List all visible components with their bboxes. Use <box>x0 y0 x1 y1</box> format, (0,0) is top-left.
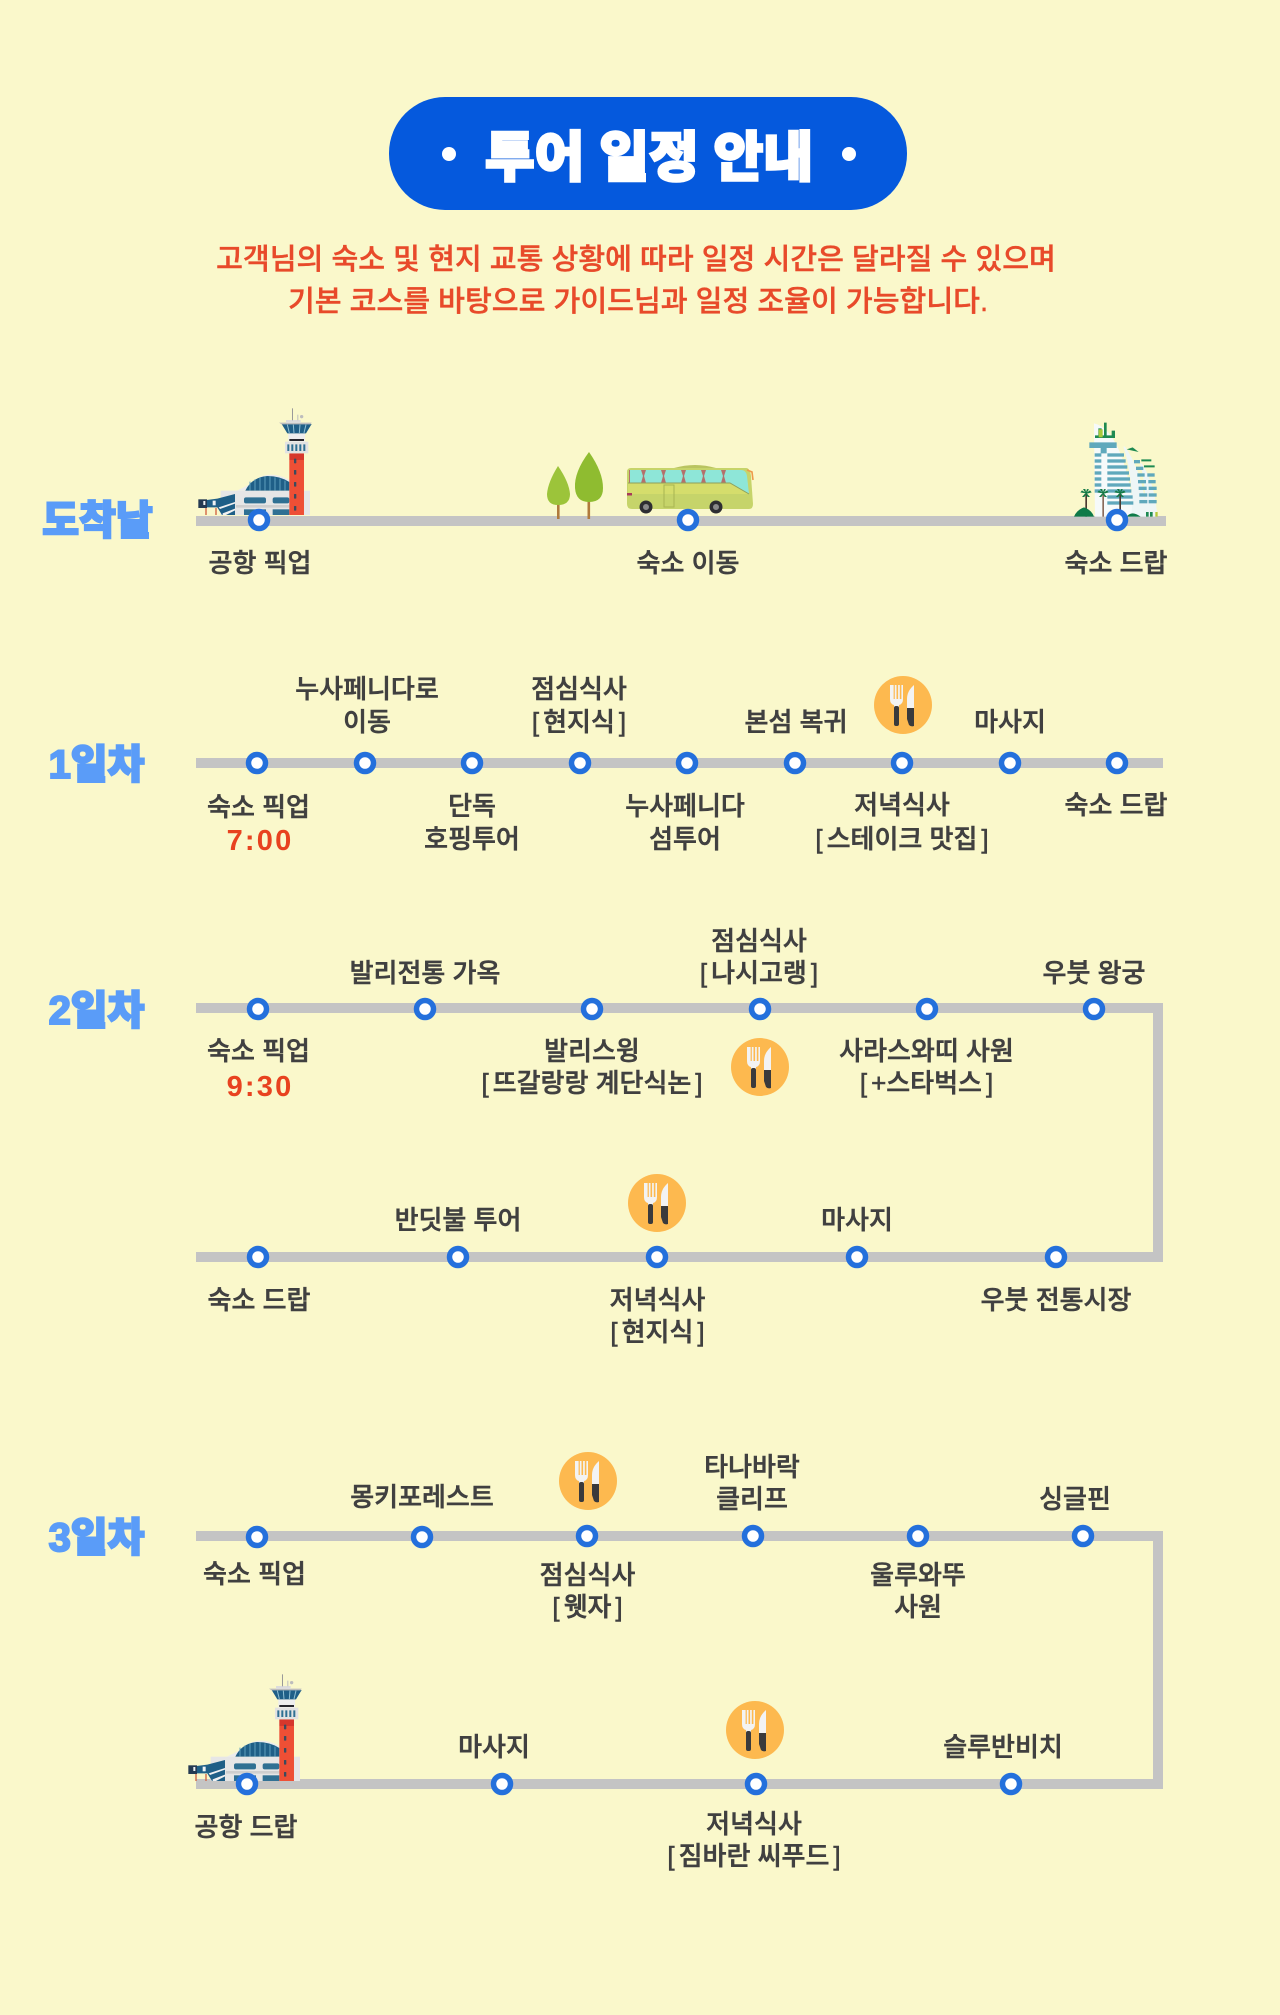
label: 마사지 <box>458 1732 530 1762</box>
notice text: 고객님의 숙소 및 현지 교통 상황에 따라 일정 시간은 달라질 수 있으며 <box>216 243 1056 276</box>
label: [나시고랭] <box>700 958 818 988</box>
icon: meal <box>874 676 932 734</box>
track <box>196 758 1163 768</box>
label: 이동 <box>343 707 391 737</box>
label: 발리전통 가옥 <box>350 958 500 988</box>
label: 본섬 복귀 <box>745 707 847 737</box>
heading: arrival day: 도착날 <box>42 499 153 543</box>
label: 섬투어 <box>649 824 721 854</box>
track <box>196 1008 1158 1257</box>
section: arrival day <box>42 408 1168 578</box>
time: 7:00 <box>227 825 293 857</box>
label: 누사페니다로 <box>295 674 439 704</box>
label: [현지식] <box>532 707 626 737</box>
stops <box>248 754 1126 772</box>
track <box>196 1536 1158 1784</box>
label: 반딧불 투어 <box>395 1205 521 1235</box>
label: 공항 드랍 <box>195 1812 298 1842</box>
label: 저녁식사 <box>706 1809 802 1839</box>
title pill <box>389 97 907 210</box>
label: 저녁식사 <box>854 790 950 820</box>
label: 몽키포레스트 <box>350 1482 494 1512</box>
icon: meal <box>628 1174 686 1232</box>
label: 숙소 드랍 <box>1065 548 1168 578</box>
label: 울루와뚜 <box>870 1560 966 1590</box>
label: 숙소 픽업 <box>207 792 310 822</box>
label: 클리프 <box>716 1484 788 1514</box>
label: [현지식] <box>610 1317 705 1347</box>
label: 우붓 전통시장 <box>981 1285 1131 1315</box>
label: 슬루반비치 <box>943 1732 1063 1762</box>
icon: trees <box>547 452 603 519</box>
stops <box>250 1000 1102 1266</box>
stops <box>238 1528 1092 1792</box>
time: 9:30 <box>227 1071 293 1103</box>
stops <box>250 512 1126 528</box>
label: [+스타벅스] <box>860 1068 993 1098</box>
label: 마사지 <box>821 1205 893 1235</box>
icon: bus <box>627 465 753 514</box>
label: 숙소 드랍 <box>208 1285 311 1315</box>
icon: airport <box>188 1674 302 1781</box>
label: 점심식사 <box>531 674 627 704</box>
section: day 2 <box>49 926 1158 1347</box>
label: 숙소 이동 <box>637 548 739 578</box>
label: 숙소 픽업 <box>207 1036 310 1066</box>
label: 숙소 드랍 <box>1065 790 1168 820</box>
label: [짐바란 씨푸드] <box>667 1841 841 1871</box>
heading: day 2: 2일차 <box>49 989 145 1033</box>
label: 숙소 픽업 <box>203 1559 306 1589</box>
label: 타나바락 <box>704 1452 800 1482</box>
heading: day 3: 3일차 <box>49 1516 145 1560</box>
label: 점심식사 <box>540 1560 635 1590</box>
label: 사원 <box>894 1592 942 1622</box>
notice text: 기본 코스를 바탕으로 가이드님과 일정 조율이 가능합니다. <box>288 285 988 318</box>
icon: meal <box>726 1701 784 1759</box>
label: 싱글핀 <box>1039 1484 1111 1514</box>
label: 점심식사 <box>711 926 807 956</box>
label: 저녁식사 <box>610 1285 705 1315</box>
label: [뜨갈랑랑 계단식논] <box>481 1068 703 1098</box>
heading: day 1: 1일차 <box>49 743 145 787</box>
icon: hotel <box>1074 423 1158 517</box>
label: [웻자] <box>552 1592 623 1622</box>
label: 사라스와띠 사원 <box>839 1036 1014 1066</box>
section: day 1 <box>49 674 1168 857</box>
icon: airport <box>198 408 312 515</box>
label: 누사페니다 <box>625 791 745 821</box>
label: 공항 픽업 <box>209 548 311 578</box>
icon: meal <box>559 1452 617 1510</box>
section: day 3 <box>49 1452 1158 1871</box>
label: 발리스윙 <box>544 1036 640 1066</box>
icon: meal <box>731 1038 789 1096</box>
label: 우붓 왕궁 <box>1043 958 1145 988</box>
track <box>196 516 1166 526</box>
label: 마사지 <box>974 707 1046 737</box>
label: [스테이크 맛집] <box>815 824 989 854</box>
label: 단독 <box>448 791 496 821</box>
title pill: 투어 일정 안내 <box>485 128 813 188</box>
label: 호핑투어 <box>424 824 520 854</box>
